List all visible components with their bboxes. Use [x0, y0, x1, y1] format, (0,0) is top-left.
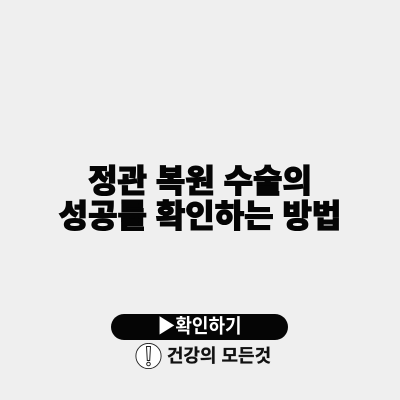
brand name: 건강의 모든것 — [167, 346, 271, 366]
title — [58, 163, 341, 234]
title: 정관 복원 수술의 — [88, 163, 312, 199]
button: confirm — [111, 314, 288, 340]
title: 성공률 확인하는 방법 — [59, 198, 341, 234]
button label: ▶확인하기 — [157, 315, 242, 337]
icon: exclamation in circle — [135, 343, 162, 369]
